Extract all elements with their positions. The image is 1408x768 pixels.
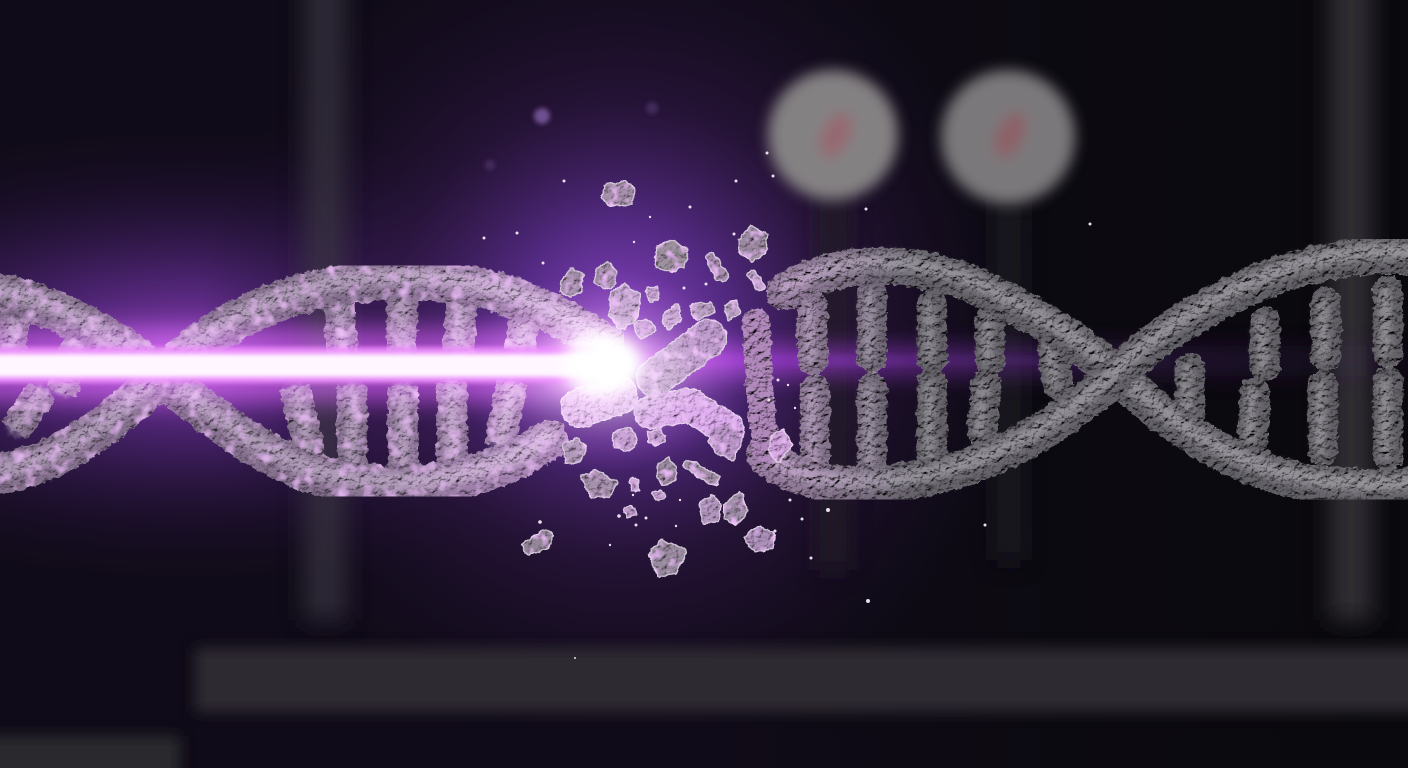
broken vertical piece xyxy=(756,322,766,450)
strand: front xyxy=(0,276,605,476)
sparks xyxy=(482,152,1092,659)
strand: upper-to-lower xyxy=(785,262,1408,487)
debris pieces xyxy=(524,183,790,576)
blurred floating particles xyxy=(485,102,658,170)
strand: rear xyxy=(0,288,548,486)
DNA fragments and debris xyxy=(524,183,790,576)
DNA helix: right fragment xyxy=(756,251,1408,487)
laser beam continuation: right side xyxy=(640,346,1408,376)
DNA helix: left fragment xyxy=(0,276,605,486)
rungs: left fragment xyxy=(10,295,526,470)
large central broken chunks xyxy=(655,338,708,378)
rungs: right fragment xyxy=(809,290,1388,468)
laser beam: left side with core xyxy=(0,328,642,402)
impact flare xyxy=(456,272,756,472)
strand: lower-to-upper xyxy=(765,251,1408,485)
